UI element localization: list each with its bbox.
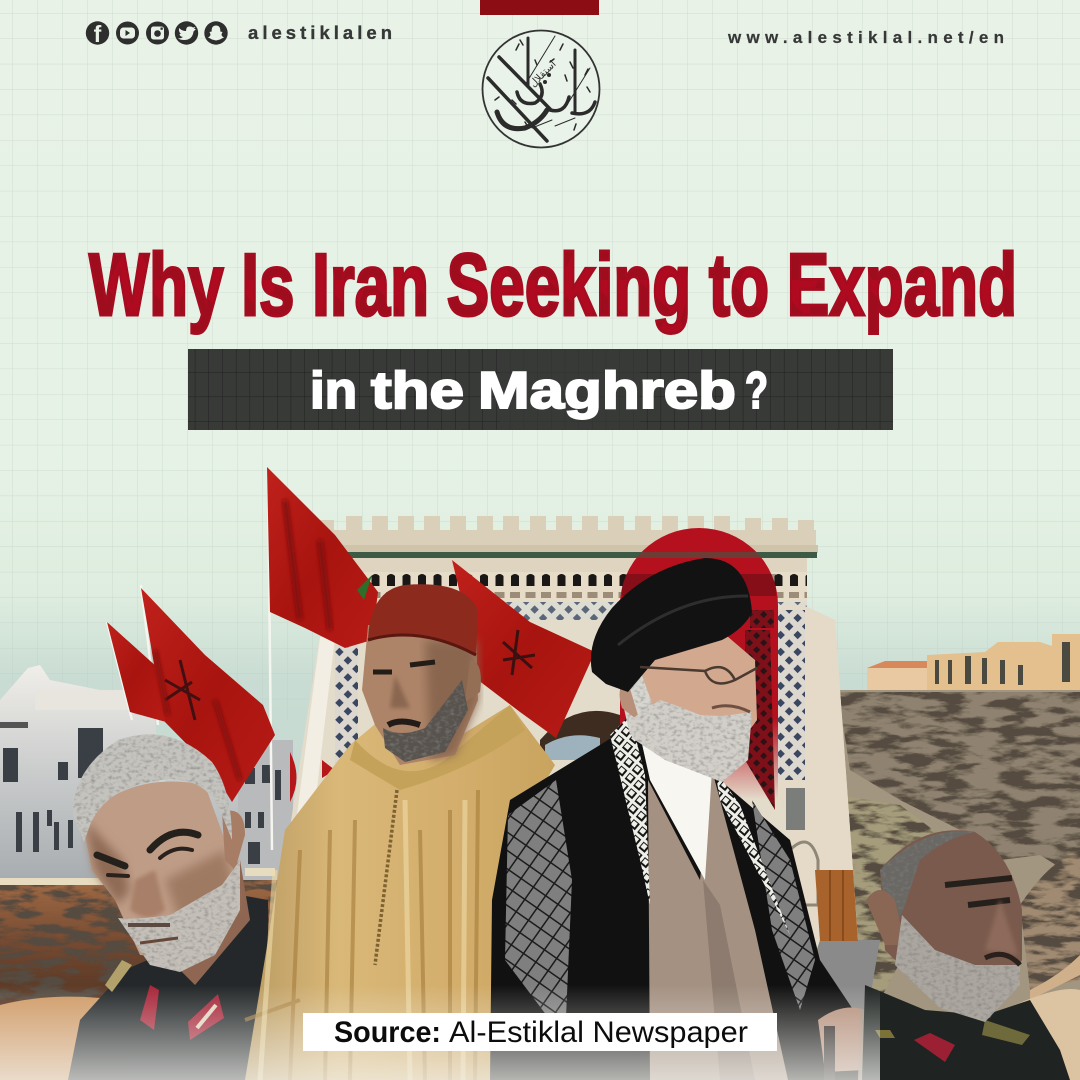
checked sleeves	[505, 780, 572, 1040]
icon: youtube	[116, 22, 139, 44]
fez	[368, 584, 478, 655]
white shirt	[640, 735, 712, 880]
logo: Al-Estiklal calligraphic seal: استقلال	[528, 59, 559, 90]
small red discs	[290, 752, 296, 802]
source label	[303, 1013, 777, 1051]
collage	[0, 467, 1080, 1080]
icon: facebook: f	[94, 21, 102, 47]
uniform	[68, 895, 268, 1080]
keffiyeh	[610, 715, 650, 905]
eyes and nose	[373, 662, 435, 672]
uniform	[862, 985, 1070, 1080]
source label: Source:	[334, 1016, 441, 1049]
rampart and ground	[0, 868, 285, 1080]
subtitle banner: in	[310, 362, 357, 420]
portrait: Moroccan king	[245, 584, 555, 1080]
turban	[591, 558, 752, 692]
subtitle banner: the	[371, 362, 464, 420]
hand and cane	[818, 1008, 870, 1072]
social handle: alestiklalen	[248, 22, 392, 43]
red circle behind leader	[620, 528, 778, 800]
moroccan flags	[107, 467, 595, 802]
brows and eyes	[97, 832, 198, 866]
beard	[118, 860, 240, 972]
face	[82, 782, 238, 960]
beard	[383, 680, 468, 762]
top red tab	[480, 0, 599, 15]
subtitle banner	[188, 349, 893, 430]
portrait: Khamenei	[490, 558, 878, 1080]
right cliff	[815, 690, 1080, 1080]
icon: snapchat	[204, 21, 228, 45]
gate right tower	[778, 605, 858, 940]
tan tunic	[648, 770, 788, 1080]
robe	[245, 705, 555, 1080]
glasses	[640, 667, 757, 683]
right side base and buildings	[867, 634, 1080, 690]
flag poles	[107, 470, 272, 850]
flag: behind king	[452, 560, 595, 738]
flag: tall	[267, 467, 378, 648]
face	[362, 625, 478, 765]
black robe	[490, 720, 870, 1080]
left town	[0, 665, 293, 890]
gate battlements	[318, 516, 816, 545]
neck	[160, 860, 250, 985]
portrait: Soleimani	[68, 734, 268, 1080]
icon: twitter	[175, 21, 198, 45]
logo: Al-Estiklal calligraphic seal	[482, 30, 600, 148]
subtitle banner: ?	[745, 362, 768, 420]
flag: left	[141, 588, 275, 802]
subtitle banner: Maghreb	[478, 362, 736, 420]
bottom fade	[0, 985, 880, 1080]
moroccan gate	[285, 516, 858, 1000]
icon: facebook	[86, 21, 109, 47]
flag: far left	[107, 622, 166, 722]
face	[630, 630, 757, 770]
head	[880, 830, 1022, 1018]
beard	[895, 915, 1020, 1022]
nose	[130, 870, 165, 918]
gate arch opening	[540, 711, 620, 760]
source label: Al-Estiklal Newspaper	[449, 1016, 748, 1049]
social media icons	[86, 21, 228, 47]
icon: instagram	[146, 22, 169, 44]
ear	[222, 811, 245, 870]
portrait: Salami	[862, 830, 1070, 1080]
hair	[73, 734, 232, 842]
website url: www.alestiklal.net/en	[727, 28, 1004, 47]
beard and hair	[630, 700, 752, 782]
